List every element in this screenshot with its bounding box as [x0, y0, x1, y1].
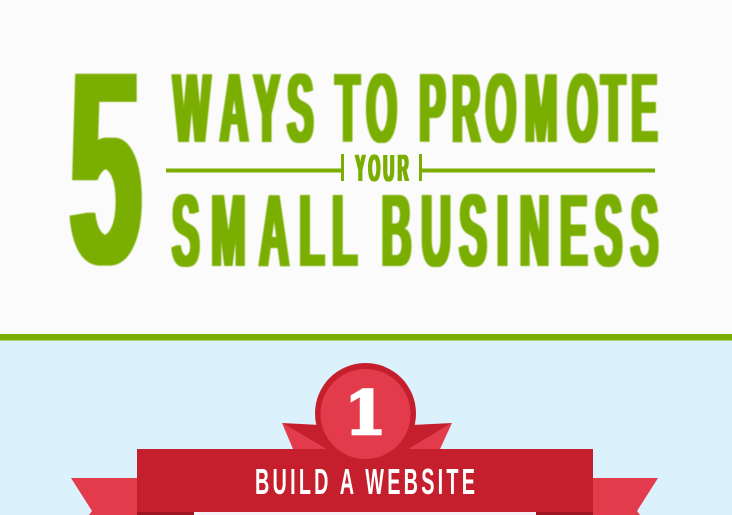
- white content panel top: [194, 512, 536, 515]
- small left fold: [282, 423, 345, 449]
- title line: small business: SMALL BUSINESS: [172, 173, 658, 288]
- step 1 badge and ribbon: [71, 363, 658, 515]
- main banner: [137, 449, 593, 512]
- banner heading: BUILD A WEBSITE: [255, 463, 475, 503]
- small right fold: [390, 423, 452, 449]
- blue section background: [0, 340, 732, 515]
- title block: [70, 13, 658, 322]
- title line: ways to promote: WAYS TO PROMOTE: [173, 53, 657, 163]
- number circle: [315, 363, 416, 464]
- green divider band: [0, 334, 732, 340]
- divider with ticks: [166, 154, 655, 181]
- title word: your: YOUR: [355, 148, 409, 190]
- ribbon right tail: [590, 478, 658, 515]
- header background: [0, 0, 732, 334]
- banner lower shadows: [137, 512, 593, 515]
- ribbon left tail: [71, 478, 140, 515]
- number 1: 1: [345, 379, 386, 449]
- big numeral 5: 5: [70, 13, 141, 322]
